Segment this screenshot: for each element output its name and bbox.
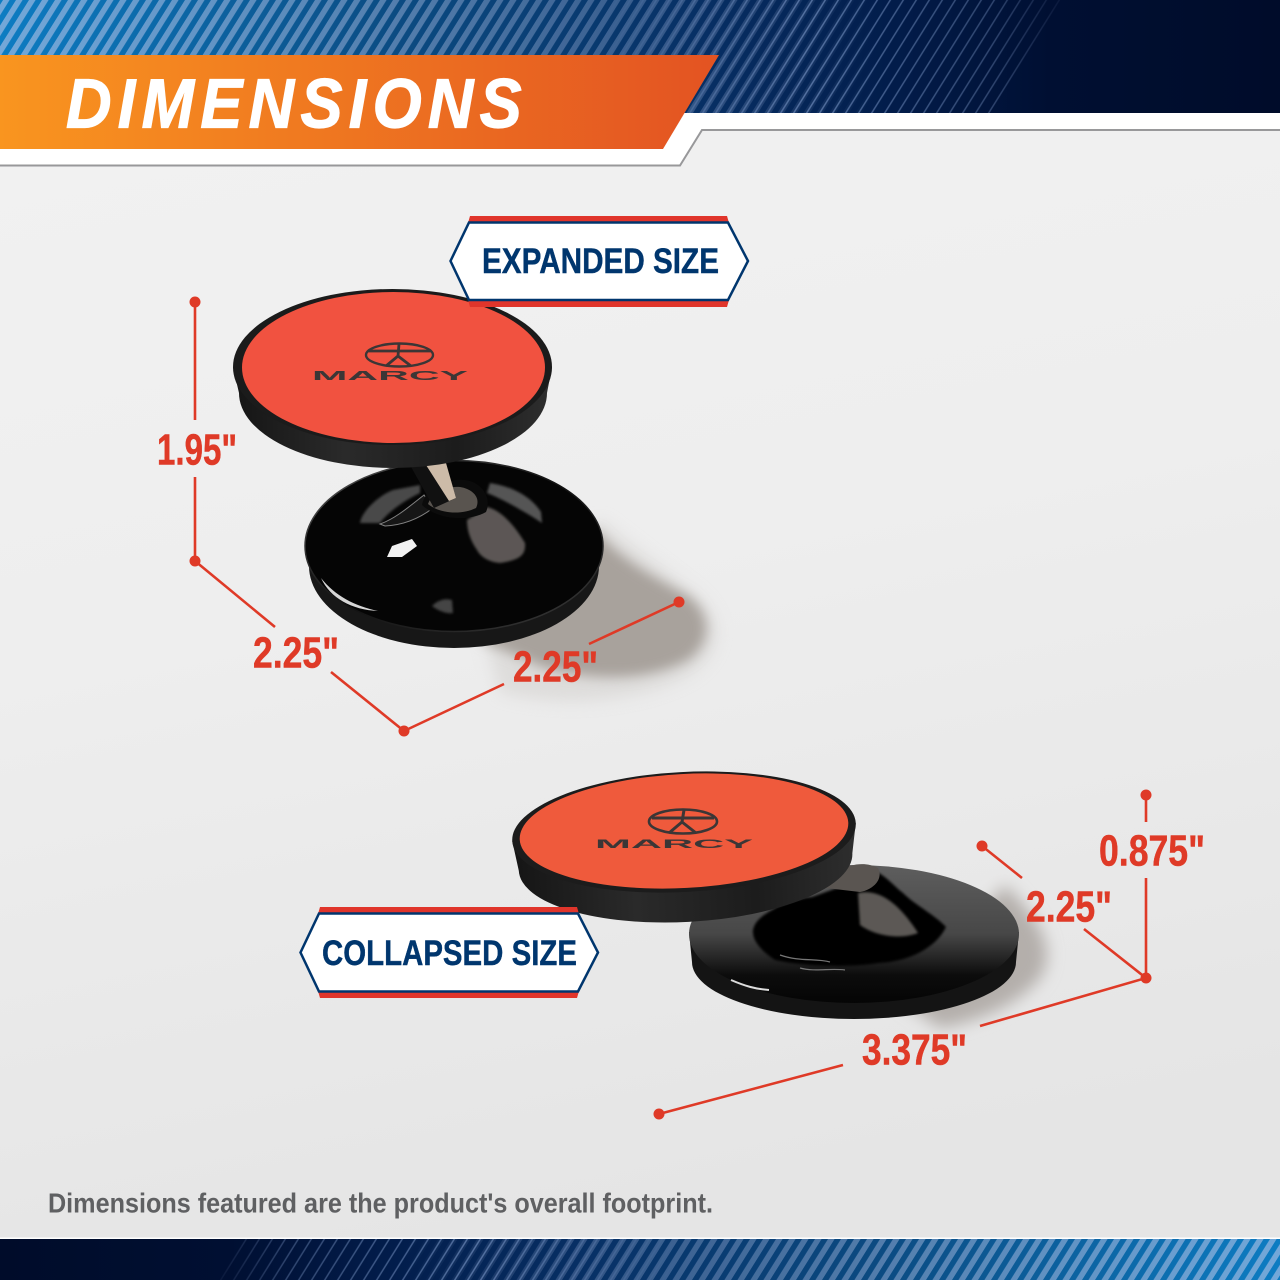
product: expanded glider bbox=[233, 289, 716, 701]
stem bbox=[410, 463, 456, 508]
dimension: collapsed width 3.375 in: 3.375" bbox=[862, 1026, 967, 1074]
top disc bbox=[233, 289, 552, 468]
dimension: collapsed depth 2.25 in bbox=[976, 840, 1146, 978]
logo: Marcy: MARCY bbox=[595, 837, 753, 851]
dimension: expanded width 2.25 in: 2.25" bbox=[513, 642, 598, 692]
dimension: expanded depth 2.25 in bbox=[195, 561, 410, 736]
footer band bbox=[0, 1238, 1280, 1280]
dimension: expanded height 1.95 in bbox=[157, 296, 237, 566]
dimension: collapsed width 3.375 in bbox=[654, 978, 1146, 1120]
logo: Marcy bbox=[312, 344, 470, 383]
base disc bbox=[689, 865, 1019, 1019]
label: collapsed size: COLLAPSED SIZE bbox=[322, 934, 577, 973]
header band bbox=[0, 0, 1280, 113]
dimension: expanded width 2.25 in bbox=[404, 596, 684, 731]
logo: Marcy: MARCY bbox=[312, 369, 470, 383]
dimension: collapsed height 0.875 in: 0.875" bbox=[1099, 826, 1205, 876]
socket bbox=[422, 480, 488, 518]
label: collapsed size bbox=[300, 907, 598, 998]
product: collapsed glider bbox=[509, 763, 1047, 1028]
cast shadow bbox=[480, 520, 716, 701]
label: expanded size bbox=[450, 216, 748, 307]
logo: Marcy bbox=[595, 810, 753, 851]
dimension: collapsed height 0.875 in bbox=[1099, 790, 1205, 984]
dimension: expanded depth 2.25 in: 2.25" bbox=[253, 628, 339, 678]
cast shadow bbox=[900, 885, 1047, 1028]
header white strip bbox=[0, 113, 1280, 166]
dimension: expanded height 1.95 in: 1.95" bbox=[157, 426, 237, 474]
label: expanded size: EXPANDED SIZE bbox=[482, 242, 719, 281]
base disc bbox=[305, 460, 603, 648]
dimension: collapsed depth 2.25 in: 2.25" bbox=[1026, 882, 1112, 932]
title banner bbox=[0, 55, 719, 149]
title: DIMENSIONS bbox=[66, 65, 528, 143]
footnote: Dimensions featured are the product's overall footprint. bbox=[48, 1188, 713, 1218]
ball joint bbox=[826, 864, 880, 892]
top disc bbox=[509, 763, 860, 931]
